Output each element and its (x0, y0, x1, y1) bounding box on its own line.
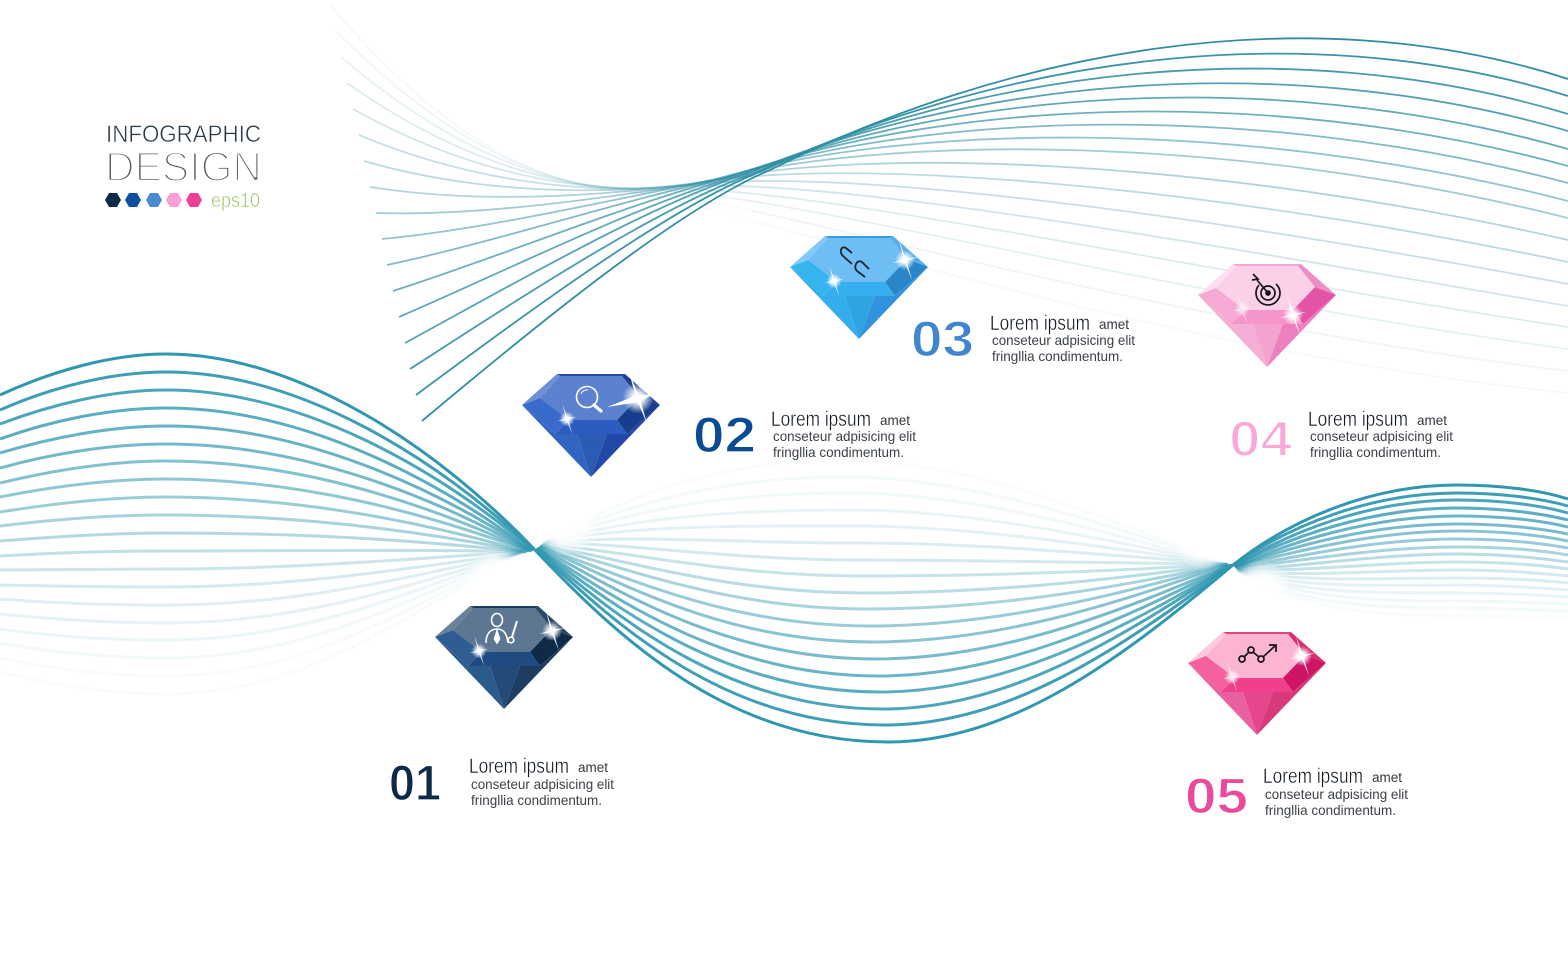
sparkle (557, 404, 577, 434)
body line 02a: conseteur adpisicing elit (773, 428, 916, 444)
sparkle (607, 372, 654, 424)
amet 05: amet (1372, 769, 1402, 785)
title block (105, 121, 262, 212)
body line 05a: conseteur adpisicing elit (1265, 786, 1408, 802)
body line 03b: fringllia condimentum. (992, 348, 1123, 364)
amet 02: amet (880, 412, 910, 428)
heading 03: Lorem ipsum (990, 312, 1090, 335)
sparkle (1222, 662, 1242, 692)
icon: presenter with pointer (486, 614, 517, 643)
amet 04: amet (1417, 412, 1447, 428)
body line 01a: conseteur adpisicing elit (471, 776, 614, 792)
sparkle (892, 240, 918, 280)
heading 05: Lorem ipsum (1263, 765, 1363, 788)
sparkle (1289, 636, 1315, 676)
lower wave middle section (535, 460, 1233, 742)
diamond 04 light pink (1198, 264, 1336, 367)
sparkle (1280, 295, 1306, 335)
diamond 03 sky blue (790, 236, 928, 339)
body line 04a: conseteur adpisicing elit (1310, 428, 1453, 444)
heading 04: Lorem ipsum (1308, 408, 1408, 431)
sparkle (1232, 294, 1252, 324)
lower wave left section (0, 354, 535, 694)
number 03: 03 (911, 311, 974, 367)
eps10 label: eps10 (211, 190, 260, 212)
palette hexagons (105, 193, 202, 207)
icon: growth chart (1239, 645, 1276, 662)
step 03 text (911, 311, 1135, 367)
body line 05b: fringllia condimentum. (1265, 802, 1396, 818)
icon: broken link (841, 247, 869, 277)
body line 01b: fringllia condimentum. (471, 792, 602, 808)
title: design: DESIGN (105, 143, 262, 190)
step 02 text (693, 407, 916, 463)
sparkle (469, 636, 489, 666)
icon: magnifier (576, 386, 601, 411)
heading 01: Lorem ipsum (469, 755, 569, 778)
amet 03: amet (1099, 316, 1129, 332)
step 01 text (389, 755, 614, 811)
number 04: 04 (1229, 411, 1292, 467)
heading 02: Lorem ipsum (771, 408, 871, 431)
icon: target with arrow (1252, 274, 1280, 305)
diamond 05 pink (1188, 632, 1326, 735)
upper wave lines (330, 5, 1568, 421)
step 04 text (1229, 408, 1453, 467)
number 05: 05 (1185, 768, 1248, 824)
amet 01: amet (578, 759, 608, 775)
body line 03a: conseteur adpisicing elit (992, 332, 1135, 348)
body line 04b: fringllia condimentum. (1310, 444, 1441, 460)
sparkle (539, 611, 565, 651)
body line 02b: fringllia condimentum. (773, 444, 904, 460)
number 01: 01 (389, 755, 441, 811)
diamond 01 navy (435, 606, 573, 709)
lower wave right section (1233, 485, 1568, 618)
step 05 text (1185, 765, 1408, 824)
number 02: 02 (693, 407, 756, 463)
title: infographic: INFOGRAPHIC (106, 121, 261, 148)
diamond 02 blue (522, 372, 660, 477)
sparkle (824, 266, 844, 296)
